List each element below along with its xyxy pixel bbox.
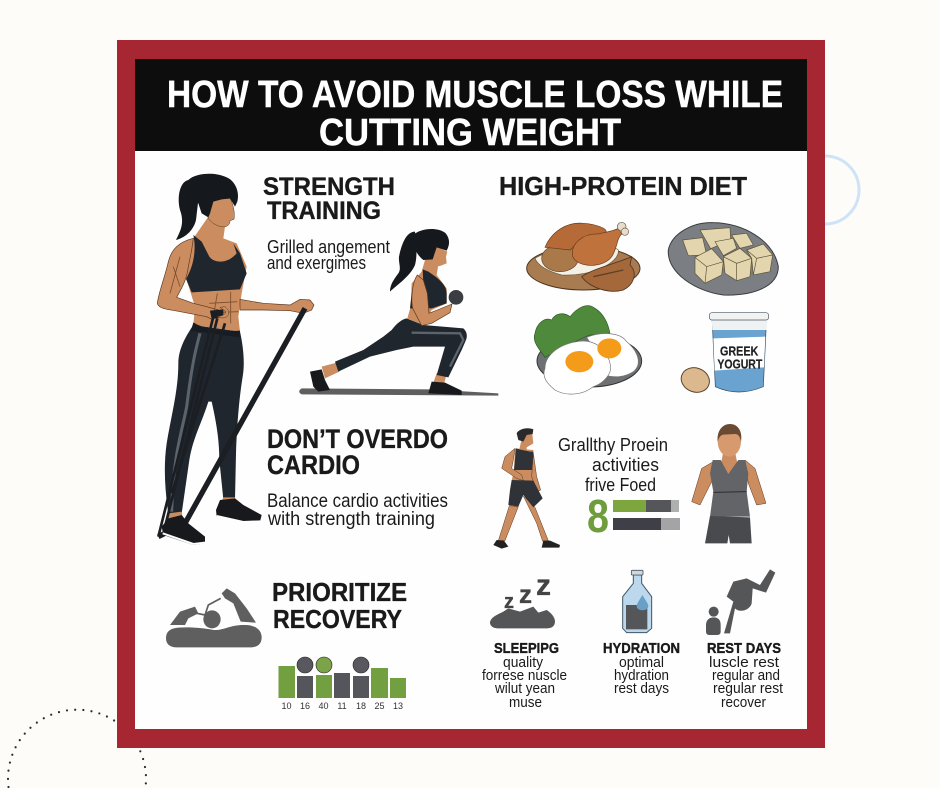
text: rest days column bbox=[707, 640, 784, 711]
shoes bbox=[493, 540, 560, 549]
chart: number eight with progress bars bbox=[587, 490, 680, 542]
text: strength training description bbox=[267, 237, 390, 273]
text: hydration column: optimal bbox=[619, 654, 664, 671]
icon: sleep zzz over mound: z bbox=[536, 569, 551, 602]
title banner: CUTTING WEIGHT bbox=[319, 112, 621, 154]
neck and torso bbox=[407, 260, 447, 325]
face bbox=[519, 433, 533, 451]
text: sleeping column: wilut yean bbox=[494, 680, 555, 697]
icon: greek yogurt tub: YOGURT bbox=[717, 356, 762, 371]
icon: sleep zzz over mound: z bbox=[519, 579, 532, 609]
text: hydration column bbox=[603, 640, 680, 697]
resistance bands bbox=[158, 308, 305, 537]
sports bra bbox=[410, 269, 447, 308]
right shoe bbox=[216, 498, 262, 522]
hair bbox=[413, 229, 449, 260]
arms bbox=[692, 460, 766, 505]
icon: tofu on grey plate bbox=[668, 223, 778, 295]
left arm bbox=[157, 238, 218, 319]
illustrations: protein foods bbox=[527, 222, 778, 396]
heading: strength training: STRENGTH bbox=[263, 173, 395, 201]
text: sleeping column: muse bbox=[509, 694, 542, 711]
sports bra bbox=[186, 235, 247, 292]
arms bbox=[502, 448, 541, 492]
leggings stripe bbox=[172, 333, 200, 512]
arm bbox=[412, 275, 452, 326]
text: strength training description: Grilled angement bbox=[267, 237, 390, 257]
red frame bbox=[117, 40, 825, 748]
hair bbox=[517, 428, 533, 442]
heading: don't overdo cardio: DON’T OVERDO bbox=[267, 424, 448, 454]
heading: high-protein diet: HIGH-PROTEIN DIET bbox=[499, 171, 747, 201]
ankles bbox=[168, 497, 236, 522]
torso skin bbox=[512, 448, 534, 482]
icon: fried eggs and lettuce bbox=[534, 306, 642, 394]
text: cardio description bbox=[267, 491, 448, 530]
bar chart: recovery: 10 bbox=[281, 701, 292, 711]
icon: grilled chicken plate bbox=[527, 222, 640, 291]
icon: resting figure bbox=[706, 569, 775, 635]
text: rest days column: regular and bbox=[712, 667, 780, 684]
ground shadow bbox=[299, 388, 498, 396]
title banner: HOW TO AVOID MUSCLE LOSS WHILE bbox=[167, 74, 783, 116]
text: cardio description: with strength training bbox=[267, 509, 435, 530]
shoes bbox=[310, 369, 330, 392]
text: rest days column: REST DAYS bbox=[707, 640, 781, 657]
illustration: woman lunging with dumbbell bbox=[299, 229, 498, 396]
hand gripping handle bbox=[217, 307, 229, 318]
pants bbox=[705, 516, 752, 543]
shorts bbox=[508, 480, 543, 507]
heading: don't overdo cardio bbox=[267, 424, 448, 480]
text: sleeping column: forrese nuscle bbox=[482, 667, 567, 684]
bar chart: recovery: 18 bbox=[356, 701, 366, 711]
head bbox=[718, 427, 741, 457]
text: cardio description: Balance cardio activities bbox=[267, 491, 448, 512]
text: rest days column: regular rest bbox=[713, 680, 784, 697]
text: rest days column: recover bbox=[721, 694, 766, 711]
text: protein activities caption bbox=[558, 435, 668, 495]
heading: prioritize recovery bbox=[272, 577, 407, 634]
text: sleeping column: SLEEPIPG bbox=[494, 640, 559, 657]
neck bbox=[720, 452, 738, 475]
icon: sleep zzz over mound: z bbox=[504, 591, 514, 613]
text: sleeping column: quality bbox=[503, 654, 543, 671]
dumbbell bbox=[449, 290, 463, 305]
face bbox=[425, 246, 447, 267]
text: protein activities caption: frive Foed bbox=[585, 475, 656, 495]
stripe bbox=[412, 333, 463, 367]
decorative light blue ring bbox=[825, 156, 859, 224]
bar chart: recovery: 11 bbox=[337, 701, 347, 711]
icon: sleep zzz over mound bbox=[490, 569, 555, 628]
ponytail bbox=[390, 232, 417, 292]
chart: number eight with progress bars: 8 bbox=[587, 490, 609, 542]
leggings bbox=[165, 325, 244, 514]
icon: water bottle bbox=[623, 570, 652, 633]
left shoe bbox=[162, 515, 205, 545]
face bbox=[205, 198, 234, 227]
tank top bbox=[514, 448, 534, 470]
illustration: standing woman with resistance band bbox=[157, 174, 498, 545]
muscle lines bbox=[170, 257, 238, 323]
text: hydration column: HYDRATION bbox=[603, 640, 680, 657]
heading: strength training bbox=[263, 173, 395, 225]
body skin bbox=[177, 217, 247, 332]
tank top bbox=[710, 460, 750, 517]
text: protein activities caption: activities bbox=[592, 455, 659, 475]
icon: greek yogurt tub: GREEK bbox=[720, 344, 759, 359]
leggings bbox=[335, 318, 467, 377]
right forearm bbox=[240, 299, 314, 313]
calves skin bbox=[322, 363, 446, 384]
heading: prioritize recovery: RECOVERY bbox=[273, 604, 402, 634]
waistband bbox=[191, 322, 240, 337]
white panel bbox=[135, 59, 807, 729]
icon: sleeping figure on mattress bbox=[166, 588, 262, 647]
bar chart: recovery: 40 bbox=[318, 701, 329, 711]
heading: strength training: TRAINING bbox=[267, 197, 381, 225]
ponytail bbox=[176, 180, 198, 240]
text: hydration column: hydration bbox=[614, 667, 669, 684]
bar chart: recovery: 25 bbox=[374, 701, 385, 711]
text: hydration column: rest days bbox=[614, 680, 669, 697]
bar chart: recovery bbox=[278, 657, 406, 711]
text: rest days column: luscle rest bbox=[709, 654, 780, 671]
heading: prioritize recovery: PRIORITIZE bbox=[272, 577, 407, 607]
text: sleeping column bbox=[482, 640, 567, 711]
heading: don't overdo cardio: CARDIO bbox=[267, 450, 360, 480]
icon: greek yogurt tub bbox=[678, 313, 769, 396]
bar chart: recovery: 16 bbox=[300, 701, 310, 711]
title banner bbox=[135, 59, 807, 154]
hair bbox=[188, 174, 238, 217]
illustration: torso in grey tank top bbox=[692, 424, 766, 543]
decorative dotted circle bbox=[8, 710, 146, 787]
bar chart: recovery: 13 bbox=[393, 701, 403, 711]
text: protein activities caption: Grallthy Proein bbox=[558, 435, 668, 455]
illustration: walking man bbox=[493, 428, 560, 549]
hair bbox=[718, 424, 741, 442]
legs bbox=[498, 496, 548, 541]
text: strength training description: and exergimes bbox=[267, 253, 366, 273]
